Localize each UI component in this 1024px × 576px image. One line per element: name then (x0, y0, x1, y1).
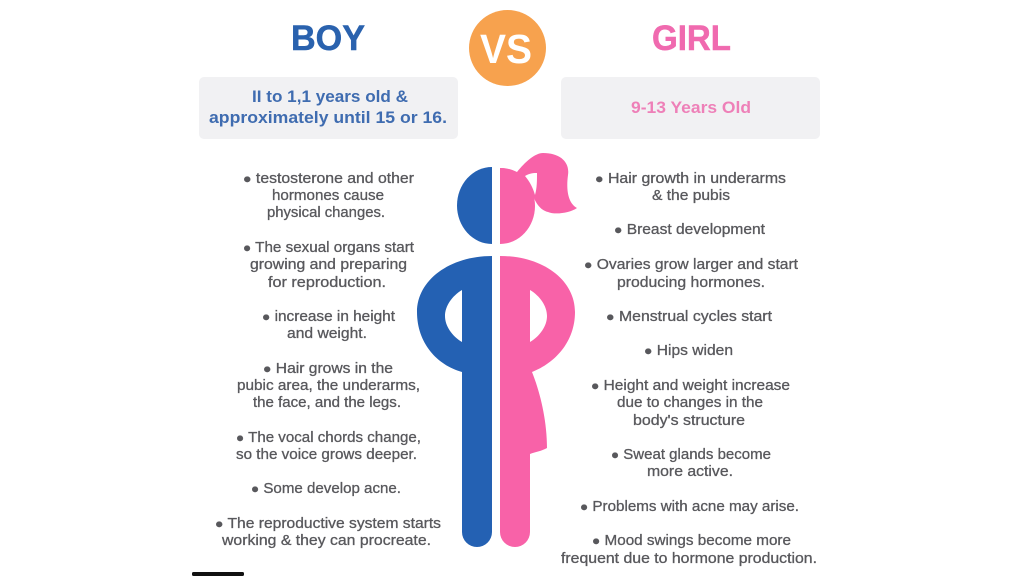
ponytail notch (525, 173, 537, 195)
panel: girl age range: 9-13 Years Old (631, 98, 751, 117)
item: sexual organs: ● The sexual organs start (243, 240, 414, 256)
item: hormones (243, 171, 414, 221)
panel: boy age range: II to 1,1 years old & (252, 87, 408, 106)
item: hair: the face, and the legs. (253, 395, 401, 411)
item: breast development: ● Breast development (614, 222, 765, 238)
item: hormones: hormones cause (272, 188, 384, 204)
item: height and weight: body's structure (633, 413, 745, 429)
panel: girl age range (561, 77, 820, 139)
item: hair (237, 361, 420, 411)
badge: vs (469, 10, 546, 86)
item: hair growth: & the pubis (652, 188, 730, 204)
item: sweat glands: more active. (647, 464, 733, 480)
heading: boy: BOY (291, 19, 365, 58)
panel: boy age range (199, 77, 458, 139)
panel: boy age range: approximately until 15 or 16. (209, 108, 447, 127)
item: height: and weight. (287, 326, 367, 342)
black bar at bottom edge (192, 572, 244, 576)
boy body (417, 256, 492, 547)
item: height (262, 309, 395, 342)
girl body (500, 256, 575, 547)
item: ovaries (584, 257, 798, 291)
heading: girl: GIRL (652, 19, 731, 58)
item: height and weight (591, 378, 790, 429)
item: ovaries: ● Ovaries grow larger and start (584, 257, 798, 273)
item: hips: ● Hips widen (644, 343, 733, 359)
girl ponytail (500, 153, 577, 213)
boy changes list (215, 171, 441, 549)
item: sexual organs (243, 240, 414, 291)
item: hair: pubic area, the underarms, (237, 378, 420, 394)
item: height and weight: due to changes in the (617, 395, 763, 411)
item: height and weight: ● Height and weight increase (591, 378, 790, 394)
boy head (457, 167, 492, 244)
item: hair growth: ● Hair growth in underarms (595, 171, 786, 187)
item: sexual organs: for reproduction. (268, 275, 386, 291)
figure: girl half (500, 153, 577, 547)
item: sweat glands (611, 447, 771, 480)
item: reproductive system (215, 516, 441, 549)
item: ovaries: producing hormones. (617, 275, 765, 291)
item: acne: ● Some develop acne. (251, 481, 401, 497)
item: mood swings: frequent due to hormone production. (561, 551, 817, 567)
item: acne: ● Problems with acne may arise. (580, 499, 799, 515)
item: voice: ● The vocal chords change, (236, 430, 421, 446)
girl changes list (561, 171, 817, 567)
item: reproductive system: ● The reproductive system starts (215, 516, 441, 532)
item: menstrual cycles: ● Menstrual cycles start (606, 309, 772, 325)
figure: boy half (417, 167, 492, 547)
item: sweat glands: ● Sweat glands become (611, 447, 771, 463)
badge: vs: VS (480, 26, 532, 72)
item: mood swings (561, 533, 817, 567)
item: reproductive system: working & they can procreate. (221, 533, 431, 549)
item: voice (236, 430, 421, 463)
item: hair: ● Hair grows in the (263, 361, 393, 377)
item: hormones: ● testosterone and other (243, 171, 414, 187)
item: voice: so the voice grows deeper. (236, 447, 417, 463)
item: sexual organs: growing and preparing (250, 257, 407, 273)
item: height: ● increase in height (262, 309, 395, 325)
item: mood swings: ● Mood swings become more (592, 533, 791, 549)
girl head (500, 168, 535, 244)
item: hormones: physical changes. (267, 205, 385, 221)
item: hair growth (595, 171, 786, 204)
